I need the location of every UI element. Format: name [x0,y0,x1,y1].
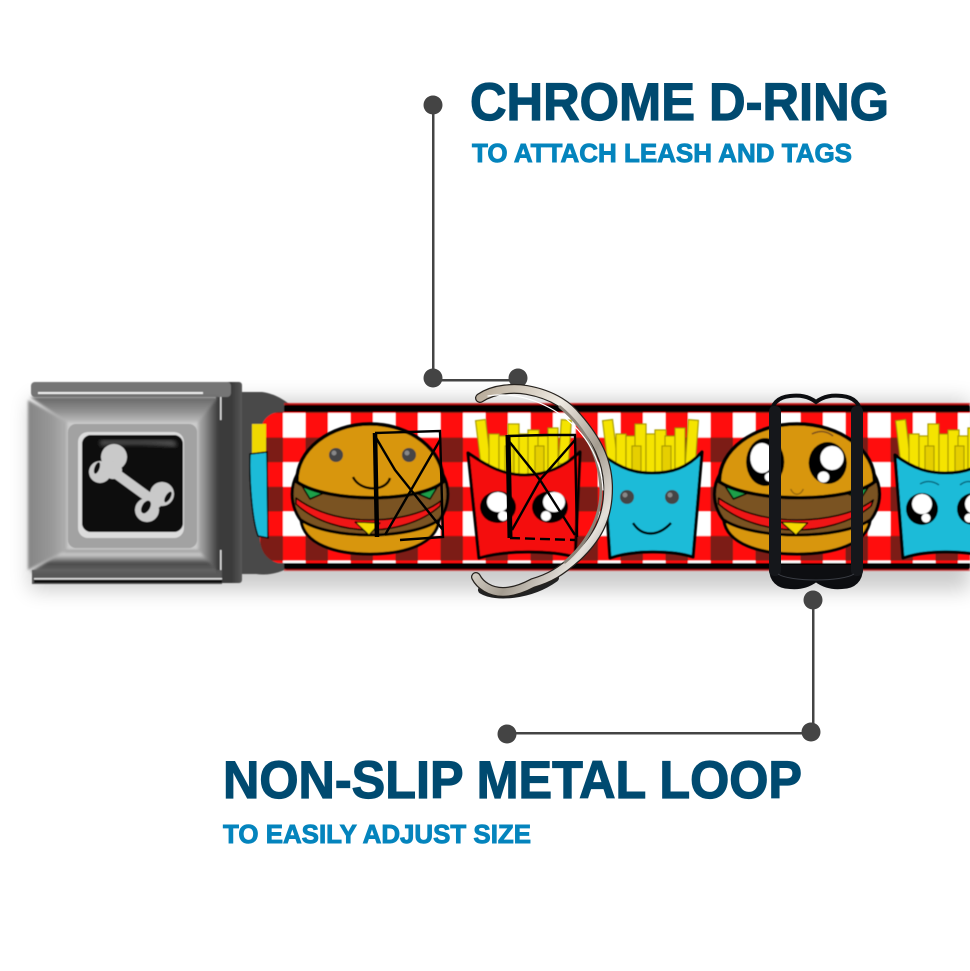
non-slip metal loop [769,396,863,587]
badge frame [68,424,197,548]
title: non-slip metal loop [223,751,802,849]
heading: non-slip metal loop: NON-SLIP METAL LOOP [223,751,802,810]
partial blue fries at left [250,424,268,538]
blue fries with big eyes, cut off at right edge [895,420,970,558]
heading: chrome d-ring: CHROME D-RING [470,73,889,132]
scribble artefact on fries [508,435,577,540]
burger with dot eyes [292,424,448,554]
burger with big eyes [715,424,879,554]
eyes [480,491,568,523]
red fries with sad eyes [468,420,580,558]
icon: bone [89,444,174,522]
scribble artefact on burger [375,431,443,540]
buckle connector tab [240,392,292,575]
strap black edges [284,404,970,570]
buckle bottom lip [32,570,222,584]
loop lower dark band [771,565,861,587]
callout line: d-ring connector [424,96,528,388]
subheading: to easily adjust size: TO EASILY ADJUST SIZE [223,819,531,849]
buckle side hinge [216,382,242,583]
black badge [78,432,184,538]
eyes and smile [620,490,679,534]
eyes [906,481,970,525]
strap checker pattern [260,412,970,563]
shadow under collar [30,400,970,590]
loop outline [771,396,861,587]
subheading: to attach leash and tags: TO ATTACH LEASH AND TAGS [472,138,852,168]
collar strap [240,392,970,575]
eyes and smile [329,448,343,462]
chrome d-ring [476,389,608,594]
eyes and mouth [746,432,847,494]
callout line: loop connector [498,590,822,744]
buckle top lip [31,382,231,397]
seatbelt buckle [28,382,242,584]
blue fries smiling [603,420,702,558]
buckle bevels [28,397,218,572]
title: chrome d-ring [470,73,889,168]
